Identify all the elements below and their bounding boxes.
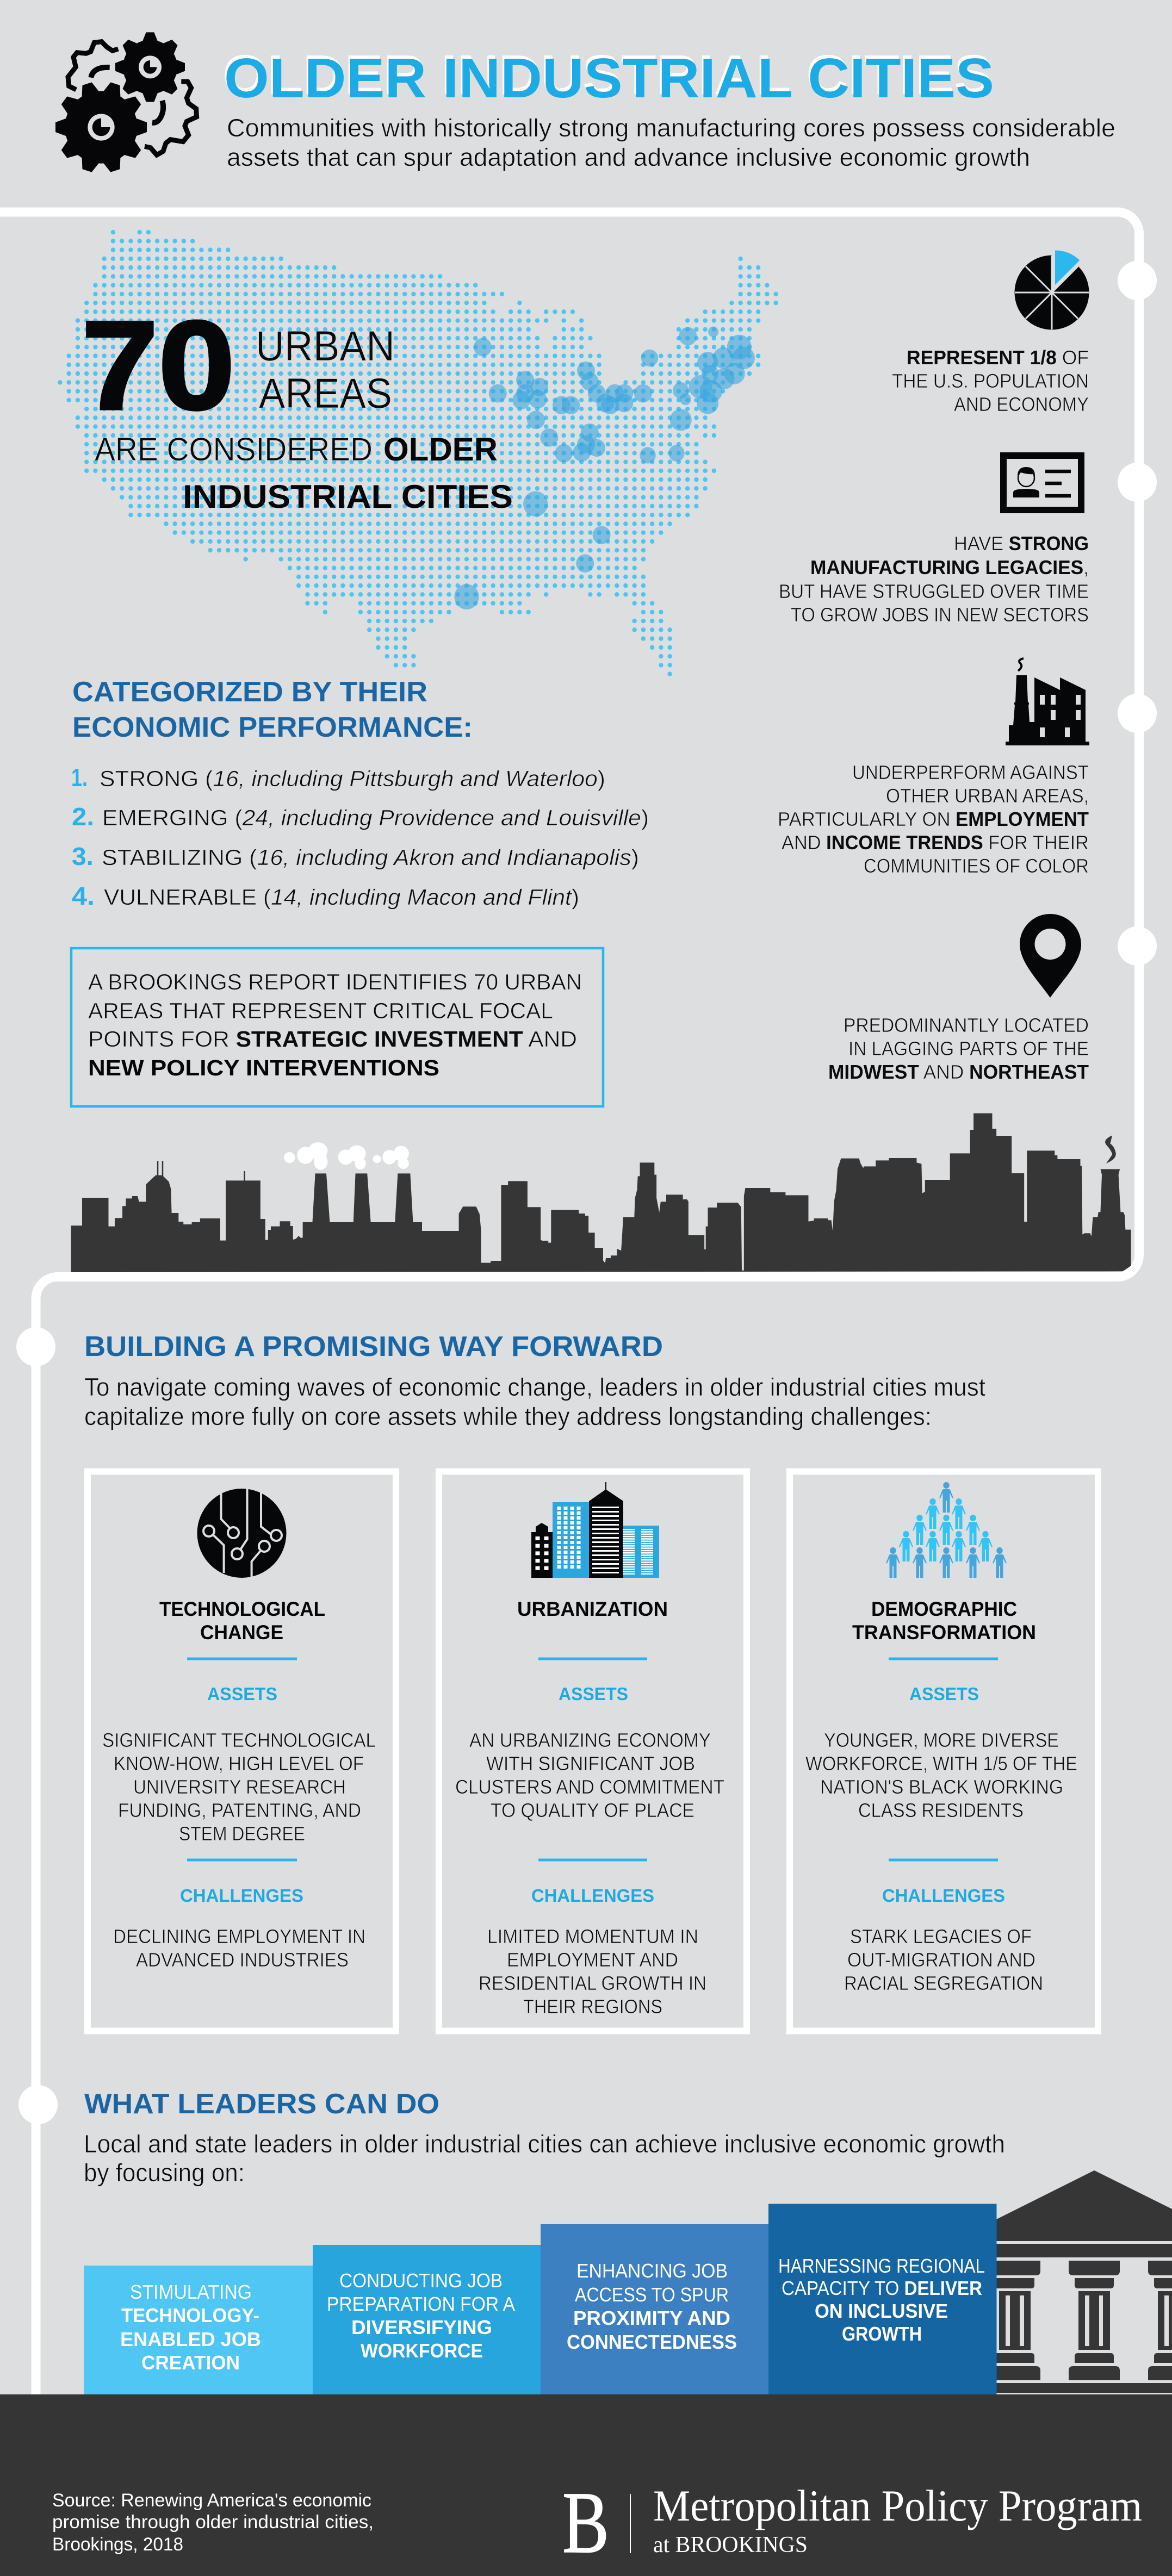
- map headline: 70 urban areas: OLDER: [383, 431, 498, 468]
- icon: city buildings: [531, 1482, 659, 1578]
- text: strong manufacturing legacies: [779, 532, 1089, 626]
- chimney smoke: [1105, 1135, 1116, 1163]
- assets: YOUNGER, MORE DIVERSE: [824, 1729, 1059, 1751]
- skyline illustration: [71, 1113, 1131, 1272]
- step: enhancing job access: [541, 2224, 768, 2394]
- list: city categories: 3.: [72, 842, 94, 870]
- text: underperform: PARTICULARLY ON EMPLOYMENT: [778, 808, 1089, 830]
- step: stimulating technology: ENABLED JOB: [120, 2328, 261, 2350]
- logo: B: [562, 2474, 609, 2572]
- text: midwest and northeast: IN LAGGING PARTS OF THE: [848, 1037, 1089, 1060]
- timeline node: building a way forward: [16, 1327, 55, 1366]
- footer: [0, 2394, 1172, 2576]
- assets: UNIVERSITY RESEARCH: [133, 1776, 346, 1798]
- US dot map: [60, 232, 776, 674]
- heading: TRANSFORMATION: [852, 1621, 1036, 1644]
- map headline: 70 urban areas: [82, 295, 513, 515]
- step: harnessing regional capacity: HARNESSING REGIONAL: [778, 2255, 985, 2277]
- panel: demographic transformation: [790, 1471, 1098, 2031]
- heading: DEMOGRAPHIC: [871, 1598, 1017, 1620]
- text: represent 1/8: THE U.S. POPULATION: [892, 370, 1089, 392]
- list: city categories: 4.: [72, 882, 95, 910]
- city markers: [454, 327, 755, 609]
- assets: AN URBANIZING ECONOMY: [469, 1729, 711, 1751]
- intro text: way forward: To navigate coming waves of economic change, leaders in older industrial cities must: [84, 1373, 985, 1401]
- icon: gears: [55, 32, 197, 173]
- list: city categories: 1.: [71, 763, 88, 792]
- text: midwest and northeast: [828, 1014, 1089, 1083]
- assets: CLUSTERS AND COMMITMENT: [455, 1776, 724, 1798]
- text: strong manufacturing legacies: MANUFACTURING LEGACIES,: [810, 556, 1089, 578]
- icon: factory: [1006, 658, 1089, 745]
- challenges: THEIR REGIONS: [523, 1995, 662, 2018]
- logo: [562, 2474, 1142, 2572]
- icon: timeline node 1: [1118, 261, 1157, 300]
- logo: Metropolitan Policy Program: [653, 2481, 1142, 2530]
- icon: id card: [1003, 456, 1081, 510]
- text: represent 1/8: REPRESENT 1/8 OF: [907, 346, 1089, 369]
- icon: people pyramid: [886, 1482, 1007, 1578]
- step: enhancing job access: ACCESS TO SPUR: [575, 2283, 729, 2306]
- text: underperform: AND INCOME TRENDS FOR THEIR: [782, 831, 1089, 854]
- text: underperform: COMMUNITIES OF COLOR: [864, 855, 1089, 877]
- title: OLDER INDUSTRIAL CITIES: [224, 47, 994, 109]
- step: harnessing regional capacity: ON INCLUSIVE: [815, 2300, 948, 2322]
- assets: NATION'S BLACK WORKING: [820, 1776, 1063, 1798]
- assets: STEM DEGREE: [179, 1822, 305, 1845]
- intro text: what leaders can do: [84, 2130, 1005, 2187]
- step: enhancing job access: PROXIMITY AND: [573, 2307, 730, 2329]
- step: harnessing regional capacity: [768, 2204, 996, 2394]
- list: city categories: STABILIZING ( 16, including Akron and Indianapolis ): [102, 845, 639, 870]
- challenges: RACIAL SEGREGATION: [844, 1972, 1043, 1994]
- challenges: ADVANCED INDUSTRIES: [136, 1949, 349, 1971]
- intro text: way forward: capitalize more fully on core assets while they address longstanding challenges:: [84, 1402, 932, 1430]
- challenges: LIMITED MOMENTUM IN: [487, 1925, 698, 1947]
- intro text: way forward: [84, 1373, 985, 1430]
- step: enhancing job access: CONNECTEDNESS: [567, 2331, 737, 2353]
- text: underperform: OTHER URBAN AREAS,: [886, 785, 1089, 807]
- text: strong manufacturing legacies: TO GROW JOBS IN NEW SECTORS: [791, 603, 1089, 626]
- timeline node: what leaders can do: [18, 2085, 58, 2124]
- icon: timeline node 4: [1118, 926, 1157, 966]
- assets: KNOW-HOW, HIGH LEVEL OF: [114, 1752, 364, 1775]
- text: strong manufacturing legacies: HAVE STRONG: [954, 532, 1089, 555]
- step: harnessing regional capacity: CAPACITY TO DELIVER: [782, 2277, 982, 2299]
- source text: Source: Renewing America's economic: [52, 2490, 371, 2511]
- callout box: AREAS THAT REPRESENT CRITICAL FOCAL: [88, 998, 553, 1023]
- step: conducting job preparation: WORKFORCE: [361, 2339, 483, 2362]
- text: represent 1/8: [892, 346, 1089, 415]
- list: city categories: STRONG (16, including Pittsburgh and Waterloo ): [100, 766, 605, 791]
- map headline: 70 urban areas: URBAN: [256, 322, 395, 370]
- assets: TO QUALITY OF PLACE: [491, 1799, 694, 1821]
- map headline: 70 urban areas: ARE CONSIDERED: [95, 431, 373, 468]
- icon: pie chart one eighth: [1015, 250, 1089, 329]
- icon: timeline node 2: [1118, 463, 1157, 502]
- list: city categories: 2.: [72, 802, 94, 831]
- heading: [159, 1598, 325, 1644]
- heading: way forward: BUILDING A PROMISING WAY FORWARD: [84, 1331, 663, 1362]
- list: city categories: [71, 763, 649, 910]
- challenges: CHALLENGES: [882, 1886, 1005, 1906]
- challenges: [844, 1886, 1043, 1994]
- heading: URBANIZATION: [517, 1598, 668, 1620]
- text: underperform: [778, 761, 1089, 877]
- step: stimulating technology: [84, 2266, 313, 2394]
- callout box: NEW POLICY INTERVENTIONS: [88, 1055, 439, 1080]
- heading: categorized: ECONOMIC PERFORMANCE:: [72, 712, 473, 743]
- icon: timeline node 3: [1118, 694, 1157, 733]
- heading: what leaders can do: WHAT LEADERS CAN DO: [84, 2088, 439, 2120]
- text: underperform: UNDERPERFORM AGAINST: [852, 761, 1089, 783]
- heading: categorized: [72, 676, 473, 743]
- step: conducting job preparation: [313, 2245, 541, 2394]
- heading: TECHNOLOGICAL: [159, 1598, 325, 1620]
- assets: WITH SIGNIFICANT JOB: [486, 1752, 695, 1775]
- buildings silhouette: [71, 1113, 1131, 1272]
- callout box: [71, 948, 603, 1106]
- text: strong manufacturing legacies: BUT HAVE STRUGGLED OVER TIME: [779, 580, 1089, 602]
- challenges: DECLINING EMPLOYMENT IN: [113, 1925, 365, 1947]
- step: conducting job preparation: CONDUCTING JOB: [339, 2269, 503, 2292]
- source text: promise through older industrial cities,: [52, 2512, 374, 2533]
- map headline: 70 urban areas: 70: [82, 295, 235, 436]
- assets: CLASS RESIDENTS: [858, 1799, 1024, 1821]
- logo: at BROOKINGS: [653, 2533, 808, 2558]
- challenges: [113, 1886, 365, 1971]
- challenges: RESIDENTIAL GROWTH IN: [479, 1972, 706, 1994]
- step: conducting job preparation: DIVERSIFYING: [351, 2316, 492, 2338]
- assets: [102, 1684, 376, 1845]
- text: represent 1/8: AND ECONOMY: [954, 393, 1089, 415]
- text: midwest and northeast: MIDWEST AND NORTHEAST: [828, 1061, 1089, 1083]
- challenges: STARK LEGACIES OF: [850, 1925, 1032, 1947]
- text: midwest and northeast: PREDOMINANTLY LOCATED: [844, 1014, 1089, 1036]
- challenges: CHALLENGES: [180, 1886, 303, 1906]
- challenges: CHALLENGES: [531, 1886, 654, 1906]
- subtitle: Communities with historically strong manufacturing cores possess considerable: [227, 114, 1115, 142]
- step: stimulating technology: CREATION: [141, 2351, 240, 2374]
- icon: location pin: [1020, 914, 1081, 998]
- challenges: [479, 1886, 706, 2018]
- challenges: OUT-MIGRATION AND: [847, 1949, 1035, 1971]
- list: city categories: EMERGING (24, including Providence and Louisville ): [102, 805, 649, 830]
- subtitle: assets that can spur adaptation and advance inclusive economic growth: [227, 143, 1030, 171]
- callout box: POINTS FOR STRATEGIC INVESTMENT AND: [88, 1026, 577, 1051]
- map headline: 70 urban areas: AREAS: [259, 369, 392, 417]
- source text: [52, 2490, 374, 2555]
- icon: circuit: [197, 1489, 286, 1578]
- panel: urbanization: [439, 1471, 747, 2031]
- assets: SIGNIFICANT TECHNOLOGICAL: [102, 1729, 376, 1751]
- assets: FUNDING, PATENTING, AND: [118, 1799, 361, 1821]
- heading: [852, 1598, 1036, 1644]
- assets: ASSETS: [559, 1684, 628, 1704]
- step: harnessing regional capacity: GROWTH: [842, 2323, 922, 2345]
- intro text: what leaders can do: Local and state leaders in older industrial cities can achieve inclusive economic growth: [84, 2130, 1005, 2158]
- step: stimulating technology: STIMULATING: [130, 2281, 252, 2303]
- source text: Brookings, 2018: [52, 2534, 183, 2555]
- assets: WORKFORCE, WITH 1/5 OF THE: [805, 1752, 1077, 1775]
- map dots: [60, 232, 776, 674]
- callout box: A BROOKINGS REPORT IDENTIFIES 70 URBAN: [88, 969, 582, 994]
- step: conducting job preparation: PREPARATION FOR A: [327, 2293, 515, 2315]
- icon: columned institution building: [996, 2170, 1172, 2393]
- intro text: what leaders can do: by focusing on:: [84, 2158, 245, 2187]
- assets: ASSETS: [909, 1684, 979, 1704]
- step: enhancing job access: ENHANCING JOB: [576, 2260, 728, 2282]
- assets: ASSETS: [207, 1684, 277, 1704]
- assets: [455, 1684, 724, 1821]
- list: city categories: VULNERABLE ( 14, including Macon and Flint ): [104, 885, 579, 910]
- step: stimulating technology: TECHNOLOGY-: [121, 2304, 259, 2326]
- panel: technological change: [88, 1471, 396, 2031]
- challenges: EMPLOYMENT AND: [507, 1949, 678, 1971]
- map headline: 70 urban areas: INDUSTRIAL CITIES: [183, 478, 513, 515]
- subtitle: [227, 114, 1115, 171]
- smoke clouds: [284, 1142, 409, 1170]
- heading: CHANGE: [200, 1621, 283, 1644]
- heading: categorized: CATEGORIZED BY THEIR: [72, 676, 427, 708]
- assets: [805, 1684, 1077, 1821]
